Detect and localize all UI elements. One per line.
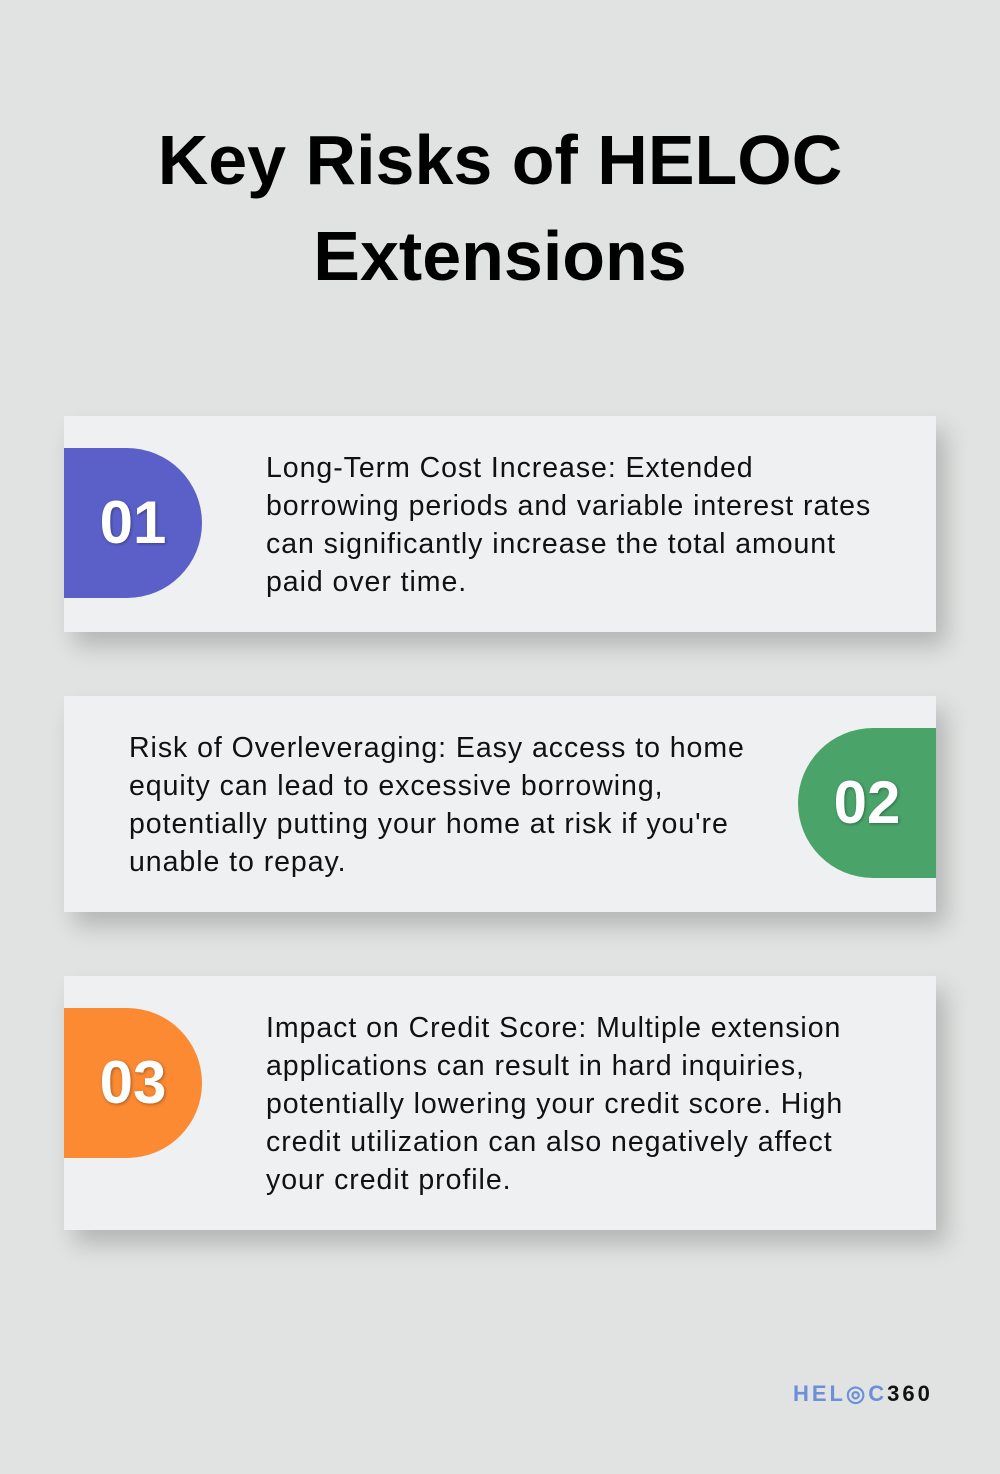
title: Extensions: [313, 217, 687, 295]
logo: HEL◎C360: [793, 1381, 933, 1406]
panel: risk 2: [64, 696, 936, 912]
text: overleveraging: equity can lead to excessive borrowing,: [129, 770, 664, 802]
badge 01: 01: [100, 489, 166, 556]
badge 03: [64, 1008, 202, 1158]
badge 03: 03: [100, 1049, 166, 1116]
text: overleveraging: potentially putting your home at risk if you're: [129, 808, 729, 840]
badge 02: [798, 728, 936, 878]
text: credit score: [266, 1012, 843, 1196]
text: long-term cost: borrowing periods and variable interest rates: [266, 490, 871, 522]
text: overleveraging: [129, 732, 745, 878]
text: long-term cost: paid over time.: [266, 566, 467, 598]
text: credit score: potentially lowering your credit score. High: [266, 1088, 843, 1120]
title: [158, 121, 842, 295]
text: long-term cost: can significantly increase the total amount: [266, 528, 836, 560]
text: overleveraging: unable to repay.: [129, 846, 346, 878]
text: credit score: your credit profile.: [266, 1164, 512, 1196]
panel: risk 1: [64, 416, 936, 632]
badge 02: 02: [834, 769, 900, 836]
text: credit score: credit utilization can also negatively affect: [266, 1126, 833, 1158]
text: overleveraging: Risk of Overleveraging: Easy access to home: [129, 732, 745, 764]
title: Key Risks of HELOC: [158, 121, 842, 199]
badge 01: [64, 448, 202, 598]
panel: risk 3: [64, 976, 936, 1230]
text: long-term cost: [266, 452, 871, 598]
text: credit score: Impact on Credit Score: Multiple extension: [266, 1012, 841, 1044]
text: long-term cost: Long-Term Cost Increase: Extended: [266, 452, 754, 484]
text: credit score: applications can result in hard inquiries,: [266, 1050, 805, 1082]
